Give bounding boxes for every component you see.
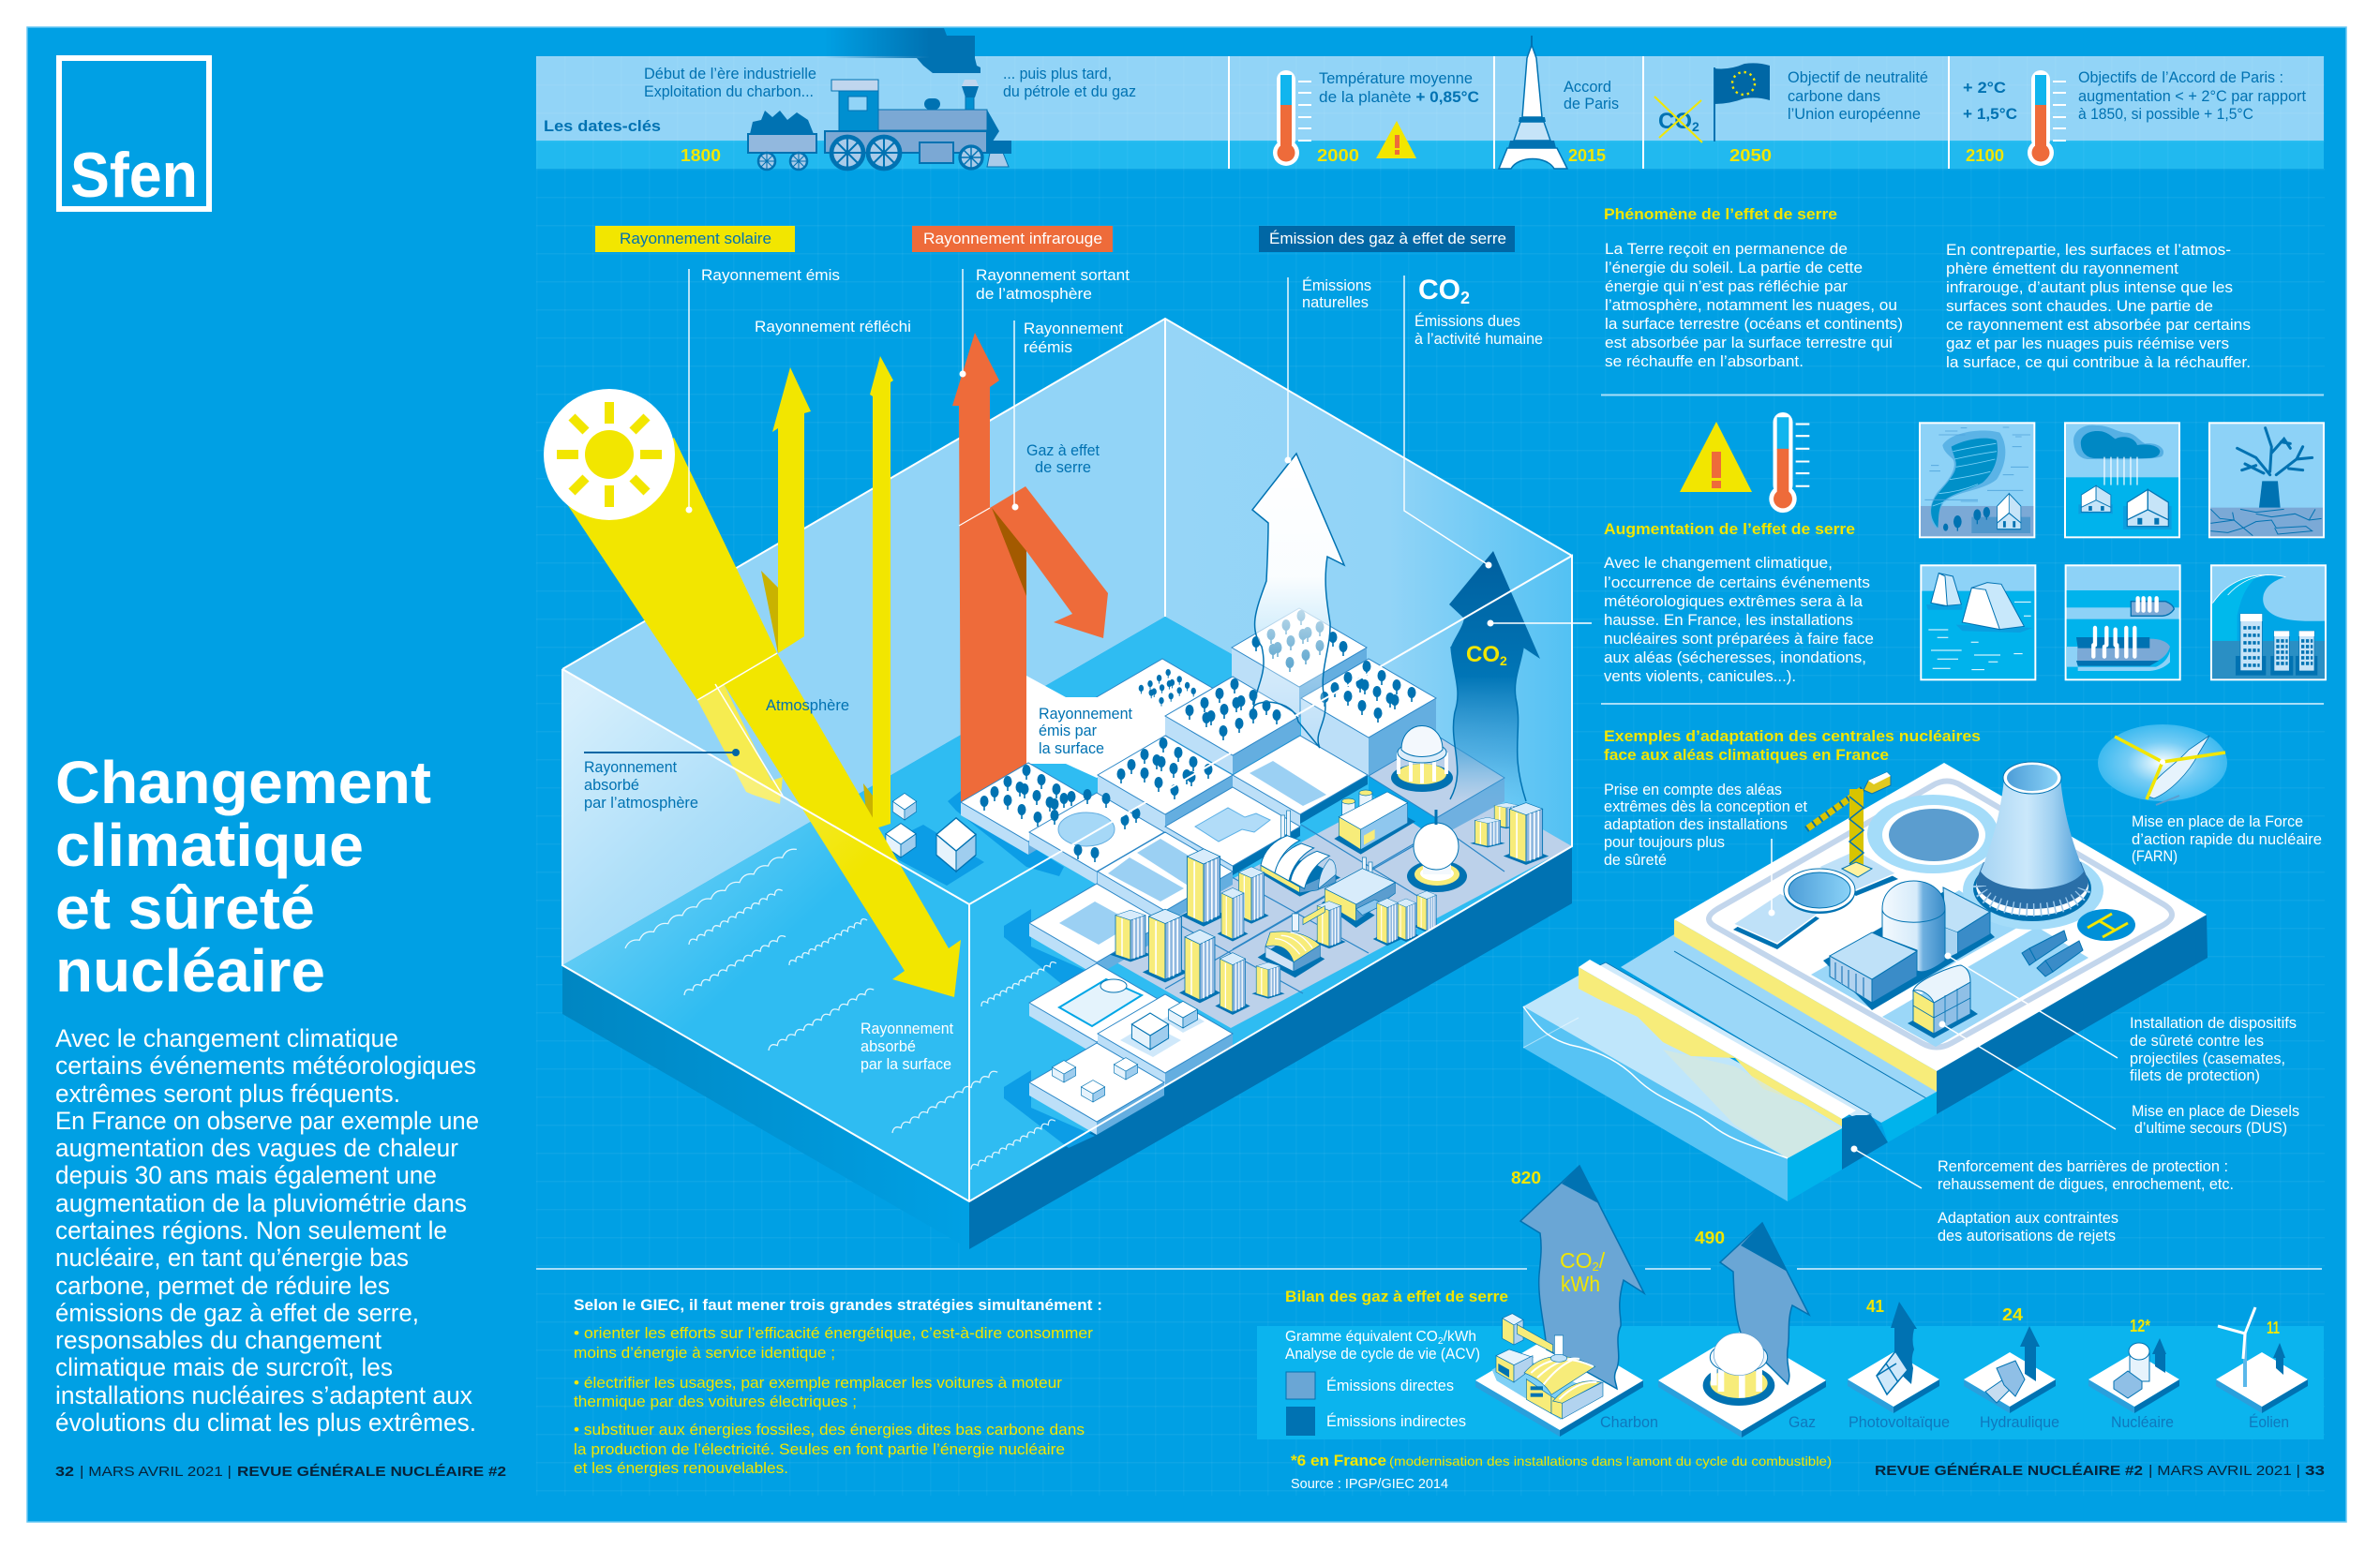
plant labels: projectiles (casemates,: [2130, 1051, 2285, 1067]
forest and farm tiles: [961, 608, 1572, 1135]
gas arrow: 490: [1695, 1229, 1725, 1247]
legend tags: Émission des gaz à effet de serre: [1269, 230, 1506, 247]
coastal houses: [876, 793, 984, 886]
scene labels: 2: [1460, 289, 1470, 307]
text: greenhouse phenomenon: la surface, ce qui contribue à la réchauffer.: [1946, 354, 2251, 371]
GIEC strategies text: [574, 1297, 1102, 1477]
intro text: évolutions du climat les plus extrêmes.: [55, 1408, 476, 1437]
coal arrow: 820: [1511, 1169, 1541, 1187]
arrow: CO2 emissions: 2: [1500, 653, 1507, 668]
three-arch factory: [1258, 811, 1340, 897]
helipad: [2077, 909, 2135, 941]
chart values and categories: 24: [2002, 1305, 2023, 1324]
coal arrow: kWh: [1561, 1272, 1600, 1296]
icon: FARN helicopter: [2098, 724, 2227, 805]
timeline 2015: Eiffel tower: [1499, 36, 1619, 169]
timeline 2000: temperature: [1273, 70, 1479, 166]
GIEC strategies text: thermique par des voitures électriques ;: [574, 1394, 857, 1410]
sea floor: [562, 617, 1572, 1201]
footnote and source: (modernisation des installations dans l’amont du cycle du combustible): [1389, 1453, 1832, 1468]
legend tags: [595, 226, 1515, 252]
hydro: [1985, 1361, 2025, 1403]
timeline 2050: neutrality: [1654, 63, 1928, 165]
intro text: Avec le changement climatique: [55, 1024, 398, 1052]
text: greenhouse phenomenon: surfaces sont chaudes. Une partie de: [1946, 298, 2213, 315]
timeline 2050: neutrality: Objectif de neutralité: [1788, 69, 1928, 86]
chart values and categories: Nucléaire: [2111, 1414, 2174, 1431]
timeline 1800: locomotive: Début de l’ère industrielle: [644, 66, 816, 82]
text: greenhouse phenomenon: En contrepartie, les surfaces et l’atmos-: [1946, 242, 2231, 259]
GIEC strategies text: et les énergies renouvelables.: [574, 1460, 788, 1477]
plant labels: des autorisations de rejets: [1938, 1228, 2116, 1244]
gas plant: [1703, 1333, 1774, 1406]
text: greenhouse phenomenon: infrarouge, d’autant plus intense que les: [1946, 279, 2233, 296]
legend tags: Rayonnement solaire: [620, 231, 771, 247]
crane: [1806, 772, 1891, 877]
text: adaptation examples: extrêmes dès la conception et: [1604, 798, 1807, 815]
scene labels: Émissions: [1302, 276, 1371, 294]
chart heading and legend: Émissions indirectes: [1326, 1412, 1466, 1430]
timeline 1800: locomotive: [544, 28, 1136, 170]
scene labels: de l’atmosphère: [976, 286, 1092, 303]
infrared arrows: [952, 333, 1108, 803]
label: surface emitted radiation: la surface: [1039, 740, 1104, 757]
icon: tornado: [1920, 423, 2034, 537]
plant labels: [1938, 813, 2322, 1244]
chart values and categories: [1600, 1297, 2289, 1431]
intro text: En France on observe par exemple une: [55, 1107, 479, 1135]
GIEC strategies text: • orienter les efforts sur l’efficacité énergétique, c’est-à-dire consommer: [574, 1325, 1094, 1342]
scene labels: absorbé: [584, 777, 639, 794]
text: greenhouse phenomenon: l’énergie du soleil. La partie de cette: [1605, 260, 1863, 276]
icon: flood: [2065, 423, 2179, 537]
GIEC strategies text: la production de l’électricité. Seules en font partie l’énergie nucléaire: [574, 1441, 1065, 1458]
reactor buildings: [1823, 881, 1995, 1010]
intro text: extrêmes seront plus fréquents.: [55, 1080, 400, 1108]
scene labels: par la surface: [861, 1056, 951, 1073]
timeline 2100: Paris objectives: 2100: [1966, 146, 2004, 165]
sun: [544, 389, 675, 520]
text: greenhouse phenomenon: la surface terrestre (océans et continents): [1605, 316, 1903, 333]
intro text: responsables du changement: [55, 1326, 382, 1354]
GIEC strategies text: • électrifier les usages, par exemple remplacer les voitures à moteur: [574, 1375, 1063, 1392]
scene labels: Rayonnement: [1024, 320, 1123, 337]
arrow: absorbed by atmosphere: [697, 684, 783, 804]
logo: Sfen: [59, 58, 209, 211]
arrow: reflected by ground: [870, 356, 893, 829]
solar panel: [1877, 1351, 1908, 1394]
arrow: CO2 emissions: CO: [1466, 642, 1500, 667]
chart heading and legend: Bilan des gaz à effet de serre: [1285, 1289, 1508, 1305]
flat-roof plant: [1322, 857, 1395, 928]
plant labels: d’ultime secours (DUS): [2134, 1120, 2287, 1137]
scene labels: Gaz à effet: [1026, 442, 1100, 459]
chart values and categories: Hydraulique: [1980, 1414, 2059, 1431]
text: greenhouse increase: aux aléas (sécheresses, inondations,: [1604, 649, 1866, 666]
plant labels: de sûreté contre les: [2130, 1033, 2264, 1050]
text: adaptation examples: [1604, 728, 1981, 869]
plant labels: Adaptation aux contraintes: [1938, 1210, 2118, 1227]
scene labels: [584, 267, 1543, 1073]
plant labels: Renforcement des barrières de protection :: [1938, 1158, 2228, 1175]
plant labels: (FARN): [2132, 848, 2178, 865]
scene labels: Rayonnement émis: [701, 267, 840, 284]
scene labels: Atmosphère: [766, 697, 849, 714]
plant equipment pads: [1733, 850, 2088, 1047]
chart heading and legend: 2: [1438, 1335, 1444, 1347]
scene labels: CO: [1418, 275, 1460, 306]
intro text: nucléaire, en tant qu’énergie bas: [55, 1244, 409, 1272]
chart band: [1257, 1326, 2324, 1439]
scene labels: par l’atmosphère: [584, 795, 698, 812]
chart heading and legend: Émissions directes: [1326, 1377, 1454, 1394]
footnote and source: *6 en France: [1291, 1453, 1386, 1469]
icon: crowded boats: [2066, 565, 2180, 679]
text: greenhouse increase: vents violents, canicules...).: [1604, 668, 1796, 685]
chart values and categories: 11: [2267, 1319, 2280, 1337]
logo: Sfen: Sfen: [70, 140, 198, 211]
arch factory: [1258, 906, 1325, 977]
chart values and categories: Éolien: [2249, 1413, 2289, 1431]
plant labels: Mise en place de la Force: [2132, 813, 2303, 830]
title: [55, 749, 431, 1005]
text: greenhouse increase: hausse. En France, les installations: [1604, 612, 1853, 629]
greenhouse gas balance chart: [1257, 1166, 2324, 1439]
ring tank: [1784, 869, 1855, 914]
intro text: augmentation des vagues de chaleur: [55, 1134, 458, 1162]
timeline 2050: neutrality: l’Union européenne: [1788, 106, 1921, 123]
footer left: [55, 1464, 506, 1480]
intro text: [55, 1024, 479, 1437]
timeline 2015: Eiffel tower: de Paris: [1564, 96, 1619, 112]
grey city floor: [1097, 769, 1572, 1028]
coal arrow: [1511, 1166, 1644, 1389]
chart heading and legend: Analyse de cycle de vie (ACV): [1285, 1346, 1480, 1363]
scene labels: Rayonnement: [584, 759, 677, 776]
text: greenhouse increase: [1604, 521, 1874, 685]
timeline 1800: locomotive: Les dates-clés: [544, 118, 661, 135]
timeline 2050: neutrality: 2: [1692, 119, 1699, 134]
timeline 2100: Paris objectives: Objectifs de l’Accord de Paris :: [2078, 69, 2283, 86]
timeline 2050: neutrality: CO: [1658, 109, 1692, 134]
scene labels: naturelles: [1302, 294, 1369, 311]
pond: [1867, 795, 1998, 873]
GIEC strategies text: • substituer aux énergies fossiles, des énergies dites bas carbone dans: [574, 1422, 1085, 1438]
chart heading and legend: Gramme équivalent CO: [1285, 1329, 1438, 1345]
scene labels: absorbé: [861, 1038, 916, 1055]
small arrows: [1891, 1302, 2285, 1384]
intro text: certaines régions. Non seulement le: [55, 1216, 447, 1244]
text: adaptation examples: adaptation des installations: [1604, 816, 1788, 833]
scene labels: réémis: [1024, 339, 1072, 356]
coal arrow: 2: [1592, 1259, 1599, 1274]
greenhouse isometric scene: [544, 267, 1592, 1249]
timeline 1800: locomotive: Exploitation du charbon...: [644, 83, 814, 100]
timeline 2050: neutrality: 2050: [1729, 146, 1772, 165]
reactor dome 1: [1391, 725, 1453, 792]
timeline 2015: Eiffel tower: Accord: [1564, 79, 1611, 96]
timeline 2000: temperature: Température moyenne: [1319, 70, 1473, 87]
atmosphere front glass: [562, 556, 1572, 1201]
footer right: | MARS AVRIL 2021 |: [2148, 1463, 2300, 1479]
background grid: [536, 56, 2325, 1496]
scene labels: de serre: [1035, 459, 1091, 476]
timeline band: [536, 56, 2324, 169]
text: greenhouse increase: météorologiques extrêmes sera à la: [1604, 593, 1864, 610]
text: greenhouse phenomenon: se réchauffe en l’absorbant.: [1605, 353, 1804, 370]
chart heading and legend: /kWh: [1444, 1329, 1476, 1345]
plant labels: d’action rapide du nucléaire: [2132, 831, 2322, 848]
plant labels: Mise en place de Diesels: [2132, 1103, 2299, 1120]
small reactor: [2114, 1343, 2149, 1398]
timeline 2000: temperature: 2000: [1317, 146, 1359, 165]
text: greenhouse phenomenon: est absorbée par la surface terrestre qui: [1605, 335, 1893, 351]
text: adaptation examples: Prise en compte des aléas: [1604, 782, 1782, 798]
timeline 2000: temperature: de la planète + 0,85°C: [1319, 89, 1479, 106]
title: et sûreté: [55, 874, 315, 942]
text: adaptation examples: de sûreté: [1604, 852, 1667, 869]
plant platform: [1674, 763, 2208, 1114]
footnote and source: Source : IPGP/GIEC 2014: [1291, 1477, 1448, 1492]
footer left: REVUE GÉNÉRALE NUCLÉAIRE #2: [237, 1464, 506, 1480]
legend tags: Rayonnement infrarouge: [923, 231, 1102, 247]
footer right: REVUE GÉNÉRALE NUCLÉAIRE #2: [1875, 1463, 2143, 1479]
intro text: émissions de gaz à effet de serre,: [55, 1299, 419, 1327]
timeline 2100: Paris objectives: [1963, 69, 2306, 166]
chart values and categories: Gaz: [1789, 1414, 1816, 1431]
sun beam and reflected arrows: [567, 356, 961, 997]
intro text: augmentation de la pluviométrie dans: [55, 1189, 467, 1217]
title: nucléaire: [55, 937, 325, 1005]
label: surface emitted radiation: émis par: [1039, 723, 1097, 739]
nuclear plant isometric: [1523, 762, 2208, 1201]
scene labels: Émissions dues: [1415, 312, 1520, 330]
label: surface emitted radiation: Rayonnement: [1039, 706, 1132, 723]
footer right: 33: [2305, 1463, 2325, 1479]
city buildings and power plants: [1110, 725, 1549, 1015]
text: adaptation examples: pour toujours plus: [1604, 834, 1725, 851]
intro text: installations nucléaires s’adaptent aux: [55, 1381, 472, 1409]
text: greenhouse phenomenon: ce rayonnement est absorbée par certains: [1946, 317, 2251, 334]
timeline 1800: locomotive: ... puis plus tard,: [1003, 66, 1112, 82]
footnote and source: [1291, 1453, 1832, 1492]
intro text: depuis 30 ans mais également une: [55, 1161, 437, 1189]
icon: icebergs: [1921, 565, 2035, 679]
scene labels: Rayonnement réfléchi: [755, 319, 911, 335]
raised grey plinth: [1369, 736, 1504, 839]
text: greenhouse phenomenon: La Terre reçoit en permanence de: [1605, 241, 1848, 258]
sea waves: [623, 846, 1056, 1170]
timeline 2100: Paris objectives: augmentation < + 2°C par rapport: [2078, 88, 2306, 105]
tanks building: [1334, 790, 1415, 855]
text: greenhouse increase: l’occurrence de certains événements: [1604, 574, 1870, 591]
chart values and categories: Photovoltaïque: [1849, 1414, 1950, 1431]
text: greenhouse phenomenon: énergie qui n’est pas réfléchie par: [1605, 278, 1849, 295]
scene labels: Rayonnement: [861, 1021, 953, 1037]
chart values and categories: 41: [1866, 1297, 1884, 1316]
text: greenhouse phenomenon: phère émettent du rayonnement: [1946, 261, 2178, 277]
scene labels: à l’activité humaine: [1415, 331, 1543, 348]
timeline 1800: locomotive: 1800: [681, 146, 721, 165]
arrow: incoming beam: [567, 438, 961, 997]
text: greenhouse increase: Avec le changement climatique,: [1604, 555, 1833, 572]
scene labels: Rayonnement sortant: [976, 267, 1130, 284]
timeline 2100: Paris objectives: à 1850, si possible + 1,5°C: [2078, 106, 2253, 123]
icon: drought: [2209, 423, 2324, 537]
icon: warning and thermometer: [1680, 412, 1809, 513]
title: Changement: [55, 749, 431, 816]
timeline 2100: Paris objectives: + 1,5°C: [1963, 106, 2017, 123]
coal arrow: /: [1599, 1248, 1606, 1273]
gas arrow: [1695, 1223, 1809, 1384]
arrow: CO2 emissions: [1449, 551, 1540, 801]
tiles: [1475, 1331, 2308, 1438]
text: adaptation examples: face aux aléas climatiques en France: [1604, 747, 1889, 764]
footer right: [1875, 1463, 2325, 1479]
arrow: reflected by atmosphere: [772, 367, 811, 653]
plant labels: filets de protection): [2130, 1067, 2260, 1084]
timeline 2015: Eiffel tower: 2015: [1568, 146, 1606, 165]
wind turbine: [2218, 1307, 2255, 1387]
DUS building: [1908, 965, 1978, 1038]
sea and dyke: [1523, 934, 1937, 1201]
text: greenhouse phenomenon: l’atmosphère, notamment les nuages, ou: [1605, 297, 1897, 314]
GIEC strategies text: moins d’énergie à service identique ;: [574, 1345, 835, 1362]
chart heading and legend: [1285, 1289, 1508, 1436]
text: greenhouse phenomenon: gaz et par les nuages puis réémise vers: [1946, 335, 2229, 352]
footer left: 32: [55, 1464, 74, 1480]
coal plant: [1492, 1314, 1603, 1420]
plant labels: rehaussement de digues, enrochement, etc.: [1938, 1176, 2234, 1193]
footer left: | MARS AVRIL 2021 |: [80, 1464, 232, 1480]
timeline 1800: locomotive: du pétrole et du gaz: [1003, 83, 1136, 100]
title: climatique: [55, 812, 364, 879]
arrow: natural emissions: [1252, 454, 1344, 748]
intro text: certains événements météorologiques: [55, 1051, 476, 1080]
reactor dome 2: [1407, 810, 1467, 892]
intro text: carbone, permet de réduire les: [55, 1272, 390, 1300]
label: surface emitted radiation: [1026, 676, 1165, 778]
leader lines: [1772, 839, 2118, 1188]
text: greenhouse phenomenon: Phénomène de l’effet de serre: [1604, 206, 1837, 223]
timeline dividers: [1229, 56, 1949, 169]
text: adaptation examples: Exemples d’adaptation des centrales nucléaires: [1604, 728, 1981, 745]
scene base: [562, 846, 1572, 1249]
chart values and categories: Charbon: [1600, 1414, 1658, 1431]
text: greenhouse phenomenon: [1604, 206, 2251, 371]
cooling tower: [1963, 762, 2103, 930]
text: greenhouse increase: Augmentation de l’effet de serre: [1604, 521, 1855, 538]
coal arrow: CO: [1560, 1248, 1592, 1273]
timeline 2050: neutrality: carbone dans: [1788, 88, 1880, 105]
timeline 2100: Paris objectives: + 2°C: [1963, 80, 2006, 97]
plant labels: Installation de dispositifs: [2130, 1015, 2297, 1032]
trucks: [2022, 931, 2083, 976]
GIEC strategies text: Selon le GIEC, il faut mener trois grandes stratégies simultanément :: [574, 1297, 1102, 1314]
intro text: climatique mais de surcroît, les: [55, 1353, 393, 1381]
text: greenhouse increase: nucléaires sont préparées à faire face: [1604, 631, 1874, 648]
atmosphere back walls: [562, 319, 1572, 965]
icon: tidal wave: [2211, 565, 2326, 679]
leader lines: [689, 269, 1592, 623]
chart values and categories: 12*: [2130, 1317, 2150, 1335]
